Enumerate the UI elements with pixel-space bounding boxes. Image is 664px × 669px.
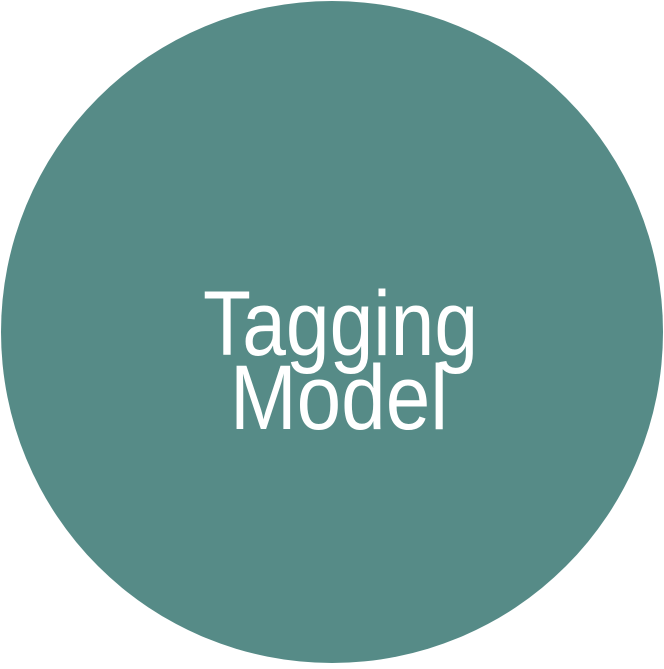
title: Tagging Model: Model [230, 347, 448, 449]
title: Tagging Model [203, 273, 478, 449]
title: Tagging Model: Tagging [203, 273, 478, 375]
